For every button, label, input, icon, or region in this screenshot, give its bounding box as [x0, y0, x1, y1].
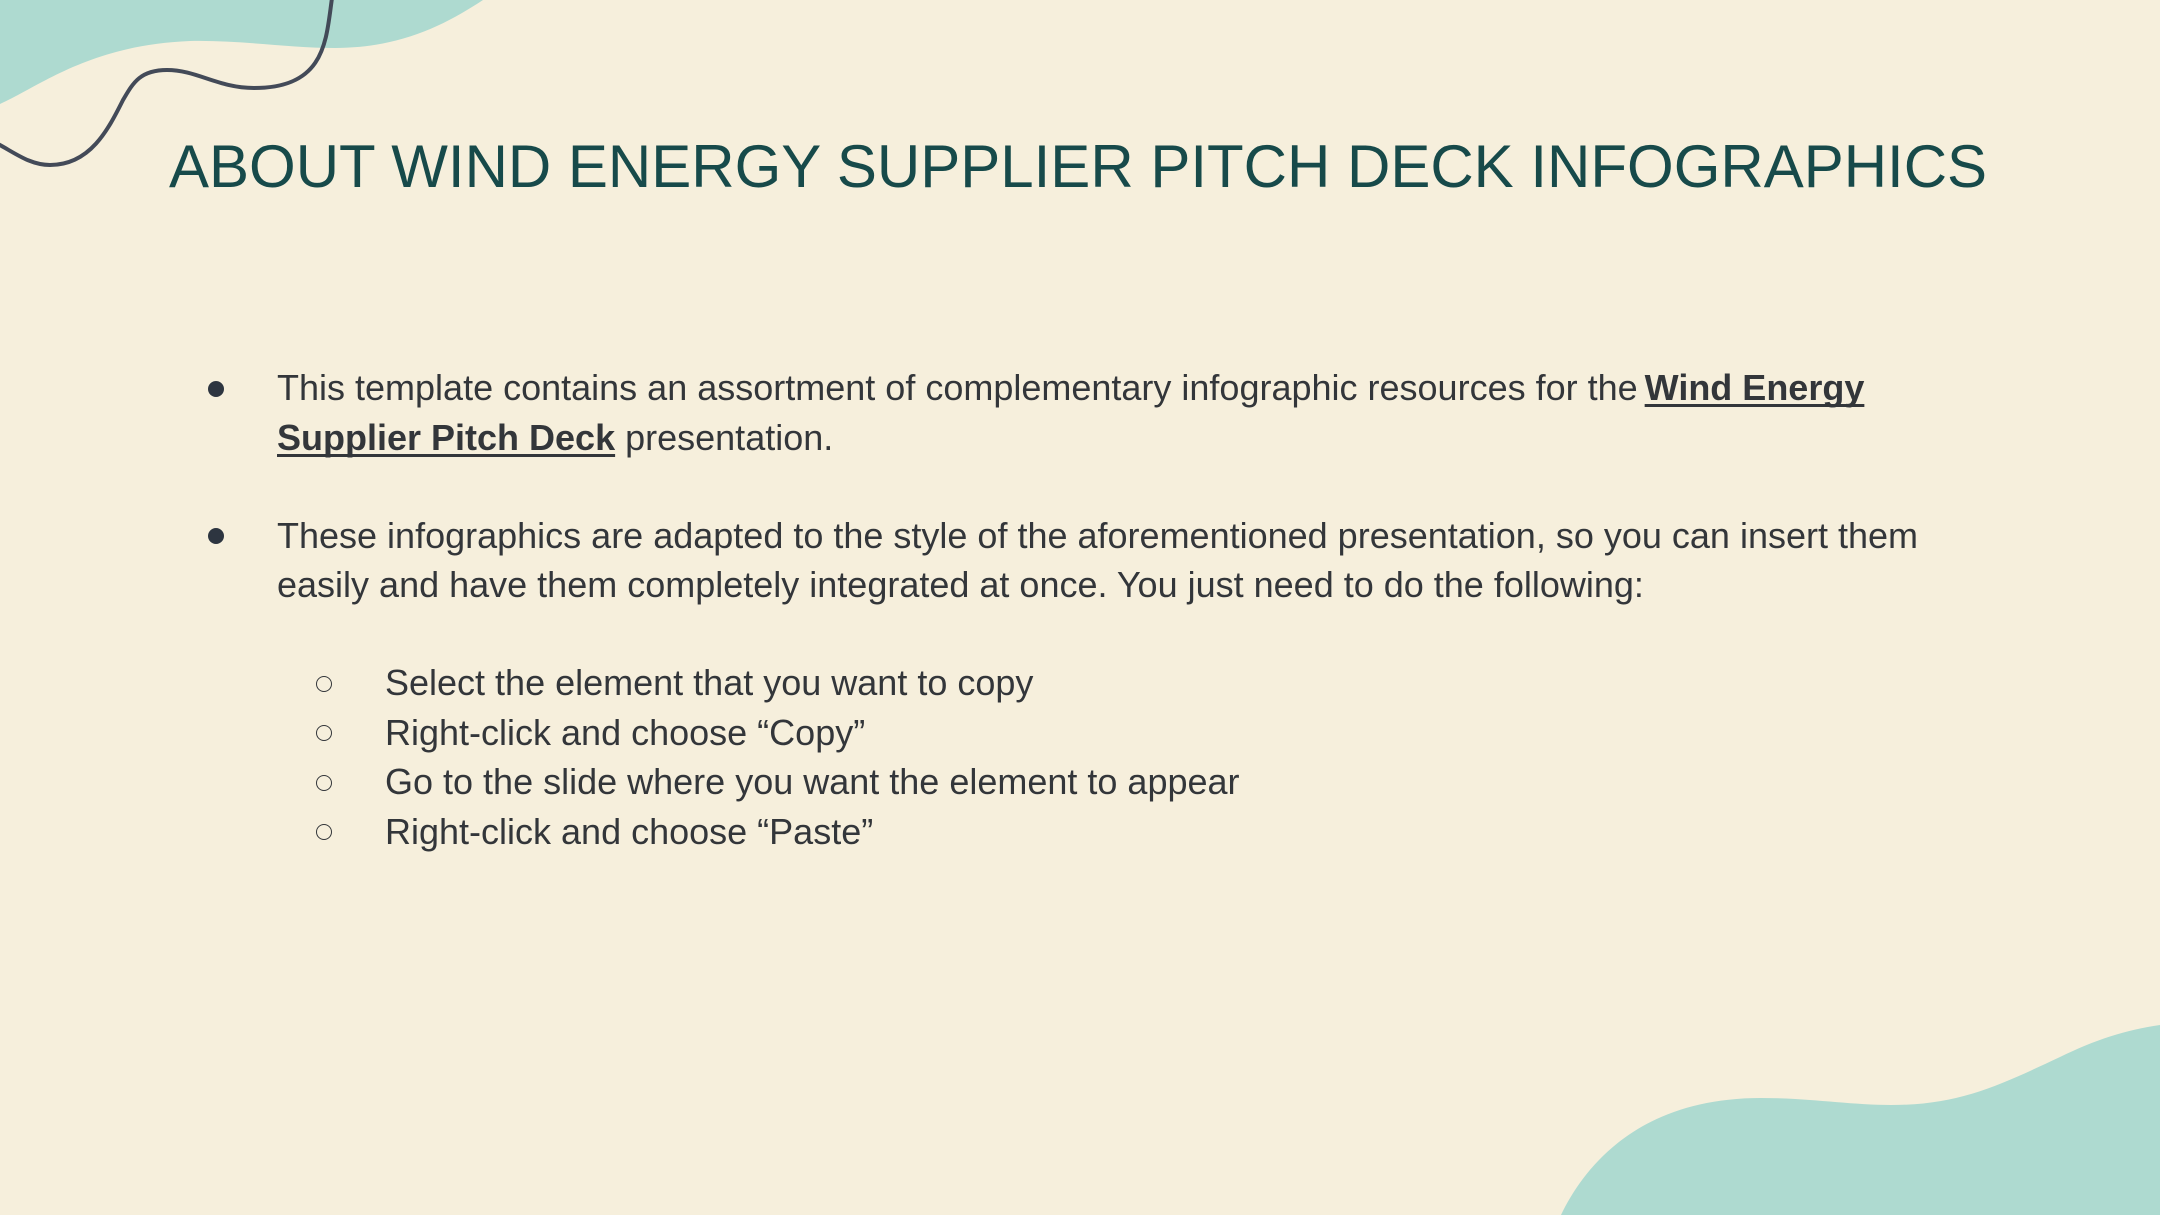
sub-bullet text 4: Right-click and choose “Paste”: [385, 810, 873, 852]
bullet text 2 line 1: These infographics are adapted to the style of the aforementioned presentation, so you can insert them: [277, 514, 1918, 556]
sub-bullet marker 3: [316, 775, 332, 791]
bullet marker 2: [208, 528, 224, 544]
title: ABOUT WIND ENERGY SUPPLIER PITCH DECK INFOGRAPHICS: [169, 133, 1987, 200]
bullet marker 1: [208, 381, 224, 397]
sub-bullet text 3: Go to the slide where you want the element to appear: [385, 761, 1240, 802]
bullet text 2 line 2: easily and have them completely integrated at once. You just need to do the following:: [277, 564, 1644, 605]
sub-bullet marker 2: [316, 725, 332, 741]
sub-bullet text 2: Right-click and choose “Copy”: [385, 712, 865, 752]
bullet text 1 line 2: Supplier Pitch Deck presentation.: [277, 416, 833, 458]
sub-bullet text 1: Select the element that you want to copy: [385, 662, 1033, 703]
sub-bullet marker 1: [316, 676, 332, 692]
bullet text 1 line 1: This template contains an assortment of complementary infographic resources for the Wind Energy: [277, 367, 1864, 408]
sub-bullet marker 4: [316, 824, 332, 840]
